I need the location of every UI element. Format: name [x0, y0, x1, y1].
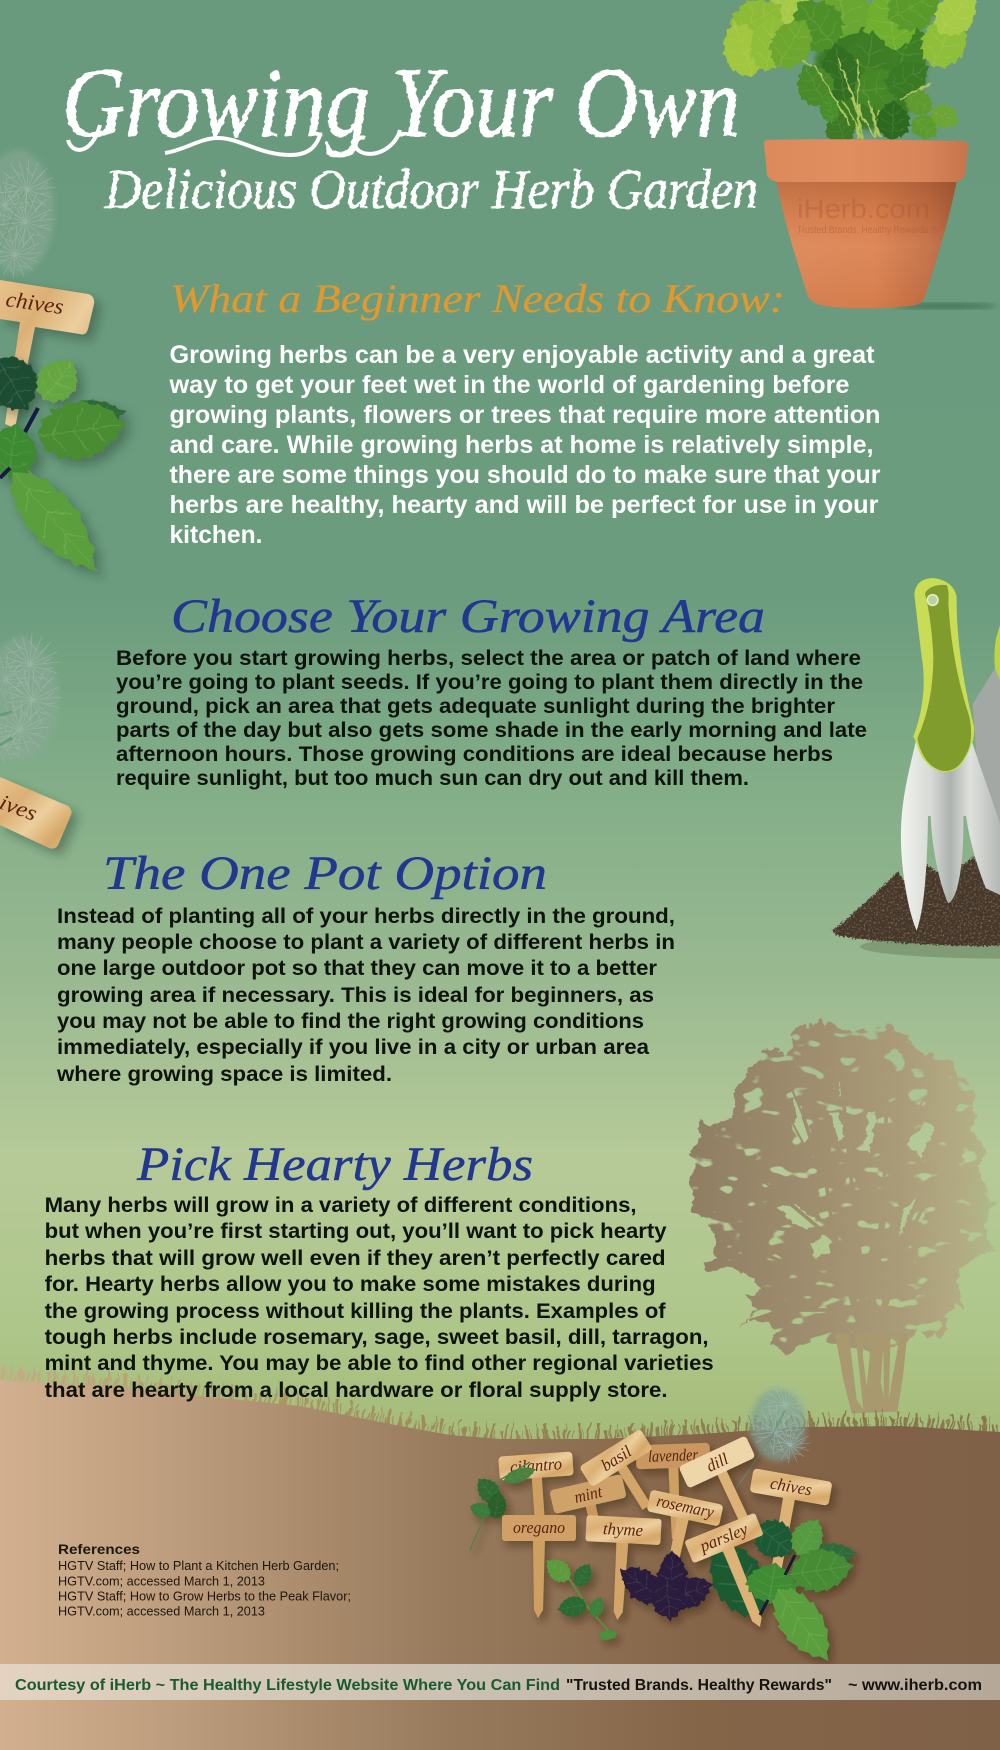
title — [62, 47, 758, 221]
paragraph: one large outdoor pot so that they can move it to a better — [57, 956, 658, 980]
title line 2: Delicious Outdoor Herb Garden — [104, 159, 758, 221]
section: the one pot option — [56, 847, 675, 1086]
footer slogan: "Trusted Brands. Healthy Rewards" — [566, 1677, 832, 1694]
disc under soil — [860, 935, 1000, 959]
marker: lavender: lavender — [648, 1445, 699, 1466]
dill sprig middle left — [0, 633, 62, 763]
reference lines: HGTV.com; accessed March 1, 2013 — [58, 1574, 265, 1588]
paragraph: ground, pick an area that gets adequate sunlight during the brighter — [116, 694, 836, 718]
marker: chives — [737, 1468, 832, 1578]
herb markers cluster — [467, 1429, 858, 1673]
tree branches — [710, 1067, 963, 1347]
heading: Pick Hearty Herbs — [136, 1138, 533, 1191]
reference lines: HGTV Staff; How to Grow Herbs to the Peak Flavor; — [58, 1588, 351, 1604]
oregano sprig — [540, 1552, 619, 1642]
references — [58, 1541, 351, 1618]
reference lines: HGTV.com; accessed March 1, 2013 — [58, 1604, 265, 1618]
marker: rosemary: rosemary — [655, 1491, 716, 1522]
paragraph: require sunlight, but too much sun can dry out and kill them. — [116, 766, 749, 790]
watermark tagline: Trusted Brands. Healthy Rewards ® — [797, 225, 938, 236]
paragraph: many people choose to plant a variety of different herbs in — [57, 930, 675, 954]
paragraph: for. Hearty herbs allow you to make some mistakes during — [45, 1272, 656, 1296]
section: choose your growing area — [116, 590, 867, 790]
intro paragraph: kitchen. — [170, 521, 262, 549]
terracotta pot — [764, 139, 997, 309]
mint sprig behind parsley — [692, 1511, 805, 1629]
reference lines: HGTV Staff; How to Plant a Kitchen Herb Garden; — [58, 1558, 339, 1573]
ground with grass edge — [0, 1378, 1000, 1750]
intro paragraph — [168, 341, 881, 549]
paragraph: afternoon hours. Those growing conditions are ideal because herbs — [116, 742, 833, 766]
marker: thyme: thyme — [603, 1519, 644, 1540]
marker: mint: mint — [572, 1482, 605, 1507]
paragraph — [56, 904, 675, 1086]
paragraph: immediately, especially if you live in a city or urban area — [57, 1035, 650, 1059]
marker: mint — [549, 1474, 632, 1537]
heading: Choose Your Growing Area — [171, 590, 765, 643]
tree silhouette — [687, 1017, 998, 1413]
marker: rosemary — [638, 1490, 723, 1567]
footer green text: Courtesy of iHerb ~ The Healthy Lifestyle Website Where You Can Find — [15, 1677, 560, 1694]
marker: cilantro: cilantro — [509, 1454, 563, 1477]
second tool — [973, 625, 1000, 897]
marker: basil — [579, 1429, 677, 1526]
soil body — [0, 1380, 1000, 1750]
section: what a beginner needs to know — [168, 276, 881, 549]
marker: dill — [678, 1435, 777, 1534]
title line 1: Growing Your Own — [62, 47, 740, 158]
watermark: iHerb.com — [797, 194, 930, 224]
marker: parsley: parsley — [696, 1519, 751, 1556]
intro paragraph: herbs are healthy, hearty and will be perfect for use in your — [170, 491, 879, 519]
paragraph: that are hearty from a local hardware or floral supply store. — [45, 1378, 668, 1402]
dill sprig among markers — [735, 1379, 811, 1490]
mint sprig left — [0, 346, 132, 588]
paragraph: mint and thyme. You may be able to find other regional varieties — [45, 1351, 714, 1375]
marker: oregano — [502, 1515, 576, 1618]
paragraph: growing area if necessary. This is ideal for beginners, as — [57, 983, 654, 1007]
paragraph: but when you’re first starting out, you’ll want to pick hearty — [45, 1219, 667, 1243]
paragraph: Before you start growing herbs, select the area or patch of land where — [116, 646, 861, 670]
plant marker: chives top left — [0, 280, 94, 428]
hand fork blade — [901, 741, 1000, 931]
garden tools and soil — [833, 578, 1000, 959]
soil mound — [833, 856, 1000, 946]
paragraph — [45, 1193, 714, 1402]
paragraph: parts of the day but also gets some shade in the early morning and late — [116, 718, 867, 742]
marker: basil: basil — [598, 1442, 635, 1475]
intro paragraph: and care. While growing herbs at home is relatively simple, — [170, 431, 874, 459]
pot body — [776, 180, 957, 308]
paragraph: where growing space is limited. — [56, 1062, 392, 1086]
paragraph: Instead of planting all of your herbs directly in the ground, — [57, 904, 675, 928]
paragraph: Many herbs will grow in a variety of different conditions, — [45, 1193, 637, 1217]
footer band — [0, 1664, 1000, 1700]
purple basil — [610, 1550, 719, 1624]
footer url: ~ www.iherb.com — [848, 1677, 982, 1694]
marker: parsley — [684, 1513, 795, 1641]
title swashes — [68, 125, 400, 155]
reference lines — [58, 1558, 351, 1618]
cilantro sprig — [467, 1462, 539, 1550]
paragraph: you’re going to plant seeds. If you’re going to plant them directly in the — [116, 670, 863, 694]
marker: dill: dill — [703, 1449, 731, 1476]
intro paragraph: there are some things you should do to make sure that your — [170, 461, 881, 489]
pot shadow — [893, 303, 997, 309]
tree trunks — [835, 1330, 907, 1413]
marker: thyme — [581, 1515, 662, 1622]
marker: lavender — [636, 1443, 713, 1544]
paragraph: the growing process without killing the plants. Examples of — [45, 1299, 666, 1323]
references heading: References — [58, 1541, 140, 1557]
pot rim — [764, 139, 968, 182]
section: pick hearty herbs — [45, 1138, 714, 1402]
mint sprig front — [743, 1511, 858, 1673]
marker: oregano: oregano — [513, 1518, 565, 1537]
heading: The One Pot Option — [103, 847, 547, 900]
paragraph — [116, 646, 867, 790]
intro paragraph: Growing herbs can be a very enjoyable activity and a great — [170, 341, 875, 369]
plant marker: chives middle left — [0, 777, 72, 849]
paragraph: herbs that will grow well even if they aren’t perfectly cared — [45, 1246, 666, 1270]
paragraph: tough herbs include rosemary, sage, sweet basil, dill, tarragon, — [45, 1325, 709, 1349]
intro paragraph: way to get your feet wet in the world of gardening before — [168, 371, 850, 399]
tree crown — [687, 1017, 998, 1354]
dill sprig top left — [0, 150, 56, 278]
intro paragraph: growing plants, flowers or trees that require more attention — [170, 401, 880, 429]
paragraph: you may not be able to find the right growing conditions — [57, 1009, 644, 1033]
grass blades — [0, 1378, 1000, 1437]
marker: cilantro — [498, 1451, 577, 1523]
marker: chives: chives — [769, 1474, 814, 1500]
plant marker: chives top left: chives — [4, 286, 65, 319]
hand fork handle — [913, 578, 974, 772]
heading: What a Beginner Needs to Know: — [170, 276, 785, 321]
plant foliage — [713, 0, 989, 148]
